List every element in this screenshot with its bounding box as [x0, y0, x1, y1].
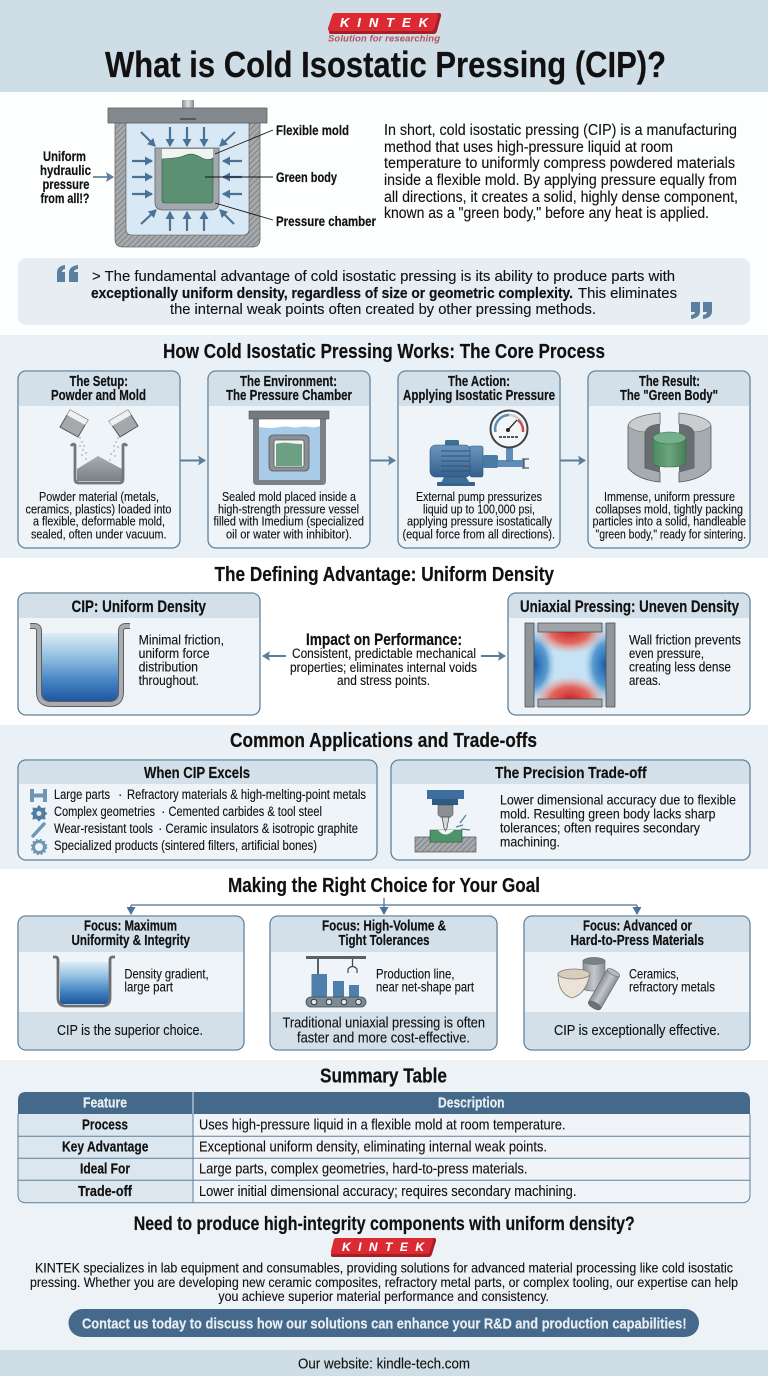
- panel: uniaxial pressing: areas.: [629, 672, 661, 688]
- step descriptions: applying pressure isostatically: [407, 514, 553, 529]
- title: What is Cold Isostatic Pressing (CIP)?: [105, 44, 666, 85]
- impact on performance: and stress points.: [337, 673, 430, 688]
- summary table: [18, 1092, 750, 1203]
- icon: complex geometry: [30, 805, 48, 822]
- step descriptions: liquid up to 100,000 psi,: [423, 501, 535, 516]
- icon: ceramics and metals: [558, 958, 621, 1012]
- summary table: Trade-off: [78, 1184, 132, 1200]
- impact on performance: Consistent, predictable mechanical: [292, 646, 476, 661]
- icon: pump with gauge: [430, 410, 529, 486]
- panel: focus advanced materials: CIP is exceptionally effective.: [554, 1023, 720, 1039]
- arrow: to uniaxial: [481, 655, 505, 657]
- panel: focus uniformity: Uniformity & Integrity: [72, 933, 190, 949]
- panel: CIP uniform density: CIP: Uniform Density: [72, 598, 207, 616]
- panel: focus uniformity: large part: [124, 980, 173, 995]
- intro paragraph: method that uses high-pressure liquid at room: [384, 139, 673, 156]
- application list: Specialized products (sintered filters, artificial bones): [54, 838, 317, 853]
- panel: focus high-volume: [270, 916, 497, 1050]
- panel: uniaxial pressing: creating less dense: [629, 659, 731, 675]
- company paragraph: [30, 1260, 738, 1304]
- application list: ·: [118, 787, 122, 802]
- call to action heading: Need to produce high-integrity components with uniform density?: [134, 1214, 635, 1235]
- diagram labels: Pressure chamber: [276, 213, 376, 229]
- summary table: Uses high-pressure liquid in a flexible mold at room temperature.: [199, 1117, 566, 1133]
- icon: density beaker: [53, 957, 115, 1006]
- panel: the environment: [208, 371, 370, 548]
- summary table: Exceptional uniform density, eliminating internal weak points.: [199, 1140, 547, 1156]
- heading: right choice: Making the Right Choice for Your Goal: [228, 875, 540, 897]
- callout: key advantage quote: exceptionally uniform density, regardless of size or geometric complexity.: [91, 285, 573, 302]
- icon: large part: [30, 789, 47, 802]
- panel: the result: The Result:: [639, 374, 700, 390]
- heading: summary table: Summary Table: [320, 1066, 447, 1088]
- intro paragraph: known as a "green body," before any heat is applied.: [384, 205, 709, 222]
- panel: focus high-volume: faster and more cost-effective.: [297, 1030, 470, 1046]
- panel: focus advanced materials: [524, 916, 750, 1050]
- panel: CIP uniform density: distribution: [139, 659, 198, 675]
- application list: Ceramic insulators & isotropic graphite: [166, 821, 358, 836]
- contact button: [68, 1309, 699, 1337]
- panel: when CIP excels: [18, 760, 377, 860]
- panel: focus advanced materials: Hard-to-Press Materials: [570, 933, 704, 949]
- intro paragraph: all directions, it creates a solid, highly dense component,: [384, 189, 738, 206]
- icon: powder poured into mold: [60, 410, 138, 483]
- contact button: Contact us today to discuss how our solutions can enhance your R&D and production capabilities!: [82, 1316, 687, 1333]
- step descriptions: Powder material (metals,: [39, 489, 159, 504]
- panel: focus uniformity: CIP is the superior choice.: [57, 1023, 203, 1039]
- panel: focus high-volume: Focus: High-Volume &: [322, 919, 446, 935]
- icon: collapsed mold and green body: [628, 413, 711, 482]
- company paragraph: you achieve superior material performance and consistency.: [218, 1288, 549, 1304]
- footer: Our website: kindle-tech.com: [298, 1356, 470, 1372]
- panel: precision trade-off: Lower dimensional accuracy due to flexible: [500, 791, 736, 807]
- step descriptions: ceramics, plastics) loaded into: [26, 501, 172, 516]
- panel: focus high-volume: Tight Tolerances: [338, 933, 430, 949]
- intro paragraph: In short, cold isostatic pressing (CIP) is a manufacturing: [384, 122, 737, 139]
- application list: Cemented carbides & tool steel: [168, 804, 322, 819]
- intro paragraph: [384, 122, 738, 222]
- callout: key advantage quote: [18, 258, 750, 325]
- step descriptions: External pump pressurizes: [416, 489, 542, 504]
- step descriptions: oil or water with inhibitor).: [226, 526, 352, 541]
- panel: focus high-volume: Traditional uniaxial pressing is often: [282, 1016, 485, 1032]
- KINTEK logo small: KINTEK: [342, 1240, 425, 1254]
- step descriptions: Sealed mold placed inside a: [222, 489, 357, 504]
- panel: the setup: The Setup:: [70, 374, 128, 390]
- callout: key advantage quote: > The fundamental advantage of cold isostatic pressing is its ability to produce parts with: [92, 268, 675, 285]
- panel: CIP uniform density: [18, 593, 260, 715]
- panel: the result: [588, 371, 750, 548]
- application list: Large parts: [54, 787, 110, 802]
- summary table: Description: [438, 1096, 504, 1112]
- header band: [0, 0, 768, 92]
- application list: Refractory materials & high-melting-point metals: [127, 787, 366, 802]
- panel: precision trade-off: machining.: [500, 833, 560, 849]
- diagram labels: pressure: [42, 176, 90, 192]
- application list: ·: [161, 804, 166, 819]
- panel: focus high-volume: near net-shape part: [376, 980, 474, 995]
- panel: focus uniformity: [18, 916, 244, 1050]
- KINTEK logo: Solution for researching: [328, 34, 440, 44]
- arrow: step 3 to 4: [560, 460, 585, 462]
- step descriptions: a flexible, deformable mold,: [33, 514, 165, 529]
- step descriptions: high-strength pressure vessel: [218, 501, 359, 516]
- panel: the result: The "Green Body": [620, 388, 718, 404]
- density map: [524, 622, 616, 708]
- panel: CIP uniform density: uniform force: [139, 645, 210, 661]
- diagram labels: from all!?: [40, 190, 90, 206]
- panel: precision trade-off: [391, 760, 750, 860]
- panel: precision trade-off: mold. Resulting green body lacks sharp: [500, 805, 716, 821]
- diagram labels: Flexible mold: [276, 122, 349, 138]
- application list: ·: [158, 821, 162, 836]
- panel: focus high-volume: Production line,: [376, 966, 454, 981]
- panel: focus advanced materials: Focus: Advanced or: [583, 919, 692, 935]
- arrow: to CIP: [263, 655, 286, 657]
- intro paragraph: inside a flexible mold. By applying pressure equally from: [384, 172, 737, 189]
- connector arrows: [131, 898, 637, 914]
- impact on performance: [263, 631, 477, 688]
- arrow: step 1 to 2: [180, 460, 205, 462]
- step descriptions: filled with Imedium (specialized: [214, 514, 364, 529]
- icon: opening quote: [57, 265, 78, 282]
- summary table: Key Advantage: [62, 1140, 148, 1156]
- icon: machining: [415, 790, 476, 852]
- panel: focus advanced materials: Ceramics,: [629, 966, 679, 981]
- heading: core process: How Cold Isostatic Pressing Works: The Core Process: [163, 341, 605, 363]
- callout: key advantage quote: This eliminates: [578, 285, 677, 302]
- step descriptions: collapses mold, tightly packing: [596, 501, 743, 516]
- panel: focus uniformity: Focus: Maximum: [84, 919, 177, 935]
- icon: specialized product: [32, 840, 46, 854]
- panel: the environment: The Pressure Chamber: [226, 388, 352, 404]
- panel: CIP uniform density: throughout.: [139, 672, 199, 688]
- callout: key advantage quote: the internal weak points often created by other pressing methods.: [170, 301, 596, 318]
- footer: [0, 1350, 768, 1376]
- panel: uniaxial pressing: Wall friction prevents: [629, 631, 741, 647]
- diagram labels: Green body: [276, 169, 337, 185]
- summary table: Feature: [83, 1096, 127, 1112]
- intro paragraph: temperature to uniformly compress powdered materials: [384, 155, 735, 172]
- heading: defining advantage: The Defining Advantage: Uniform Density: [214, 564, 555, 586]
- panel: focus advanced materials: refractory metals: [629, 980, 715, 995]
- panel: precision trade-off: tolerances; often requires secondary: [500, 819, 700, 835]
- summary table: Ideal For: [80, 1162, 130, 1178]
- icon: beaker with uniform density: [30, 626, 130, 704]
- impact on performance: Impact on Performance:: [306, 631, 462, 649]
- summary table: Large parts, complex geometries, hard-to-press materials.: [199, 1162, 527, 1178]
- panel: the environment: The Environment:: [240, 374, 337, 390]
- panel: the action: [398, 371, 560, 548]
- impact on performance: properties; eliminates internal voids: [290, 660, 477, 675]
- application list: Complex geometries: [54, 804, 155, 819]
- diagram labels: [40, 122, 376, 229]
- panel: uniaxial pressing: even pressure,: [629, 645, 704, 661]
- panel: the setup: [18, 371, 180, 548]
- panel: CIP uniform density: Minimal friction,: [139, 631, 224, 647]
- panel: focus uniformity: Density gradient,: [124, 966, 209, 981]
- panel: precision trade-off: The Precision Trade-off: [495, 765, 647, 782]
- arrow: step 2 to 3: [370, 460, 395, 462]
- diagram labels: hydraulic: [40, 162, 91, 178]
- step descriptions: (equal force from all directions).: [402, 526, 555, 541]
- panel: the setup: Powder and Mold: [51, 388, 146, 404]
- panel: the action: Applying Isostatic Pressure: [403, 388, 555, 404]
- heading: applications: Common Applications and Trade-offs: [230, 730, 537, 752]
- panel: the action: The Action:: [448, 374, 510, 390]
- KINTEK logo small: [331, 1238, 436, 1257]
- icon: wear-resistant tool: [33, 824, 44, 836]
- KINTEK logo: KINTEK: [340, 15, 430, 30]
- diagram labels: Uniform: [43, 148, 86, 164]
- panel: when CIP excels: When CIP Excels: [144, 765, 250, 782]
- icon: production line: [306, 956, 366, 1007]
- application list: Wear-resistant tools: [54, 821, 153, 836]
- pressure vessel diagram: [40, 100, 376, 247]
- icon: closing quote: [691, 302, 712, 319]
- summary table: Lower initial dimensional accuracy; requires secondary machining.: [199, 1184, 576, 1200]
- step descriptions: Immense, uniform pressure: [604, 489, 735, 504]
- application list: [54, 787, 366, 853]
- step descriptions: [26, 489, 746, 541]
- summary table: Process: [82, 1117, 128, 1133]
- icon: pressure chamber: [249, 411, 329, 485]
- panel: uniaxial pressing: [508, 593, 750, 724]
- KINTEK logo: [328, 13, 441, 44]
- step descriptions: sealed, often under vacuum.: [31, 526, 166, 541]
